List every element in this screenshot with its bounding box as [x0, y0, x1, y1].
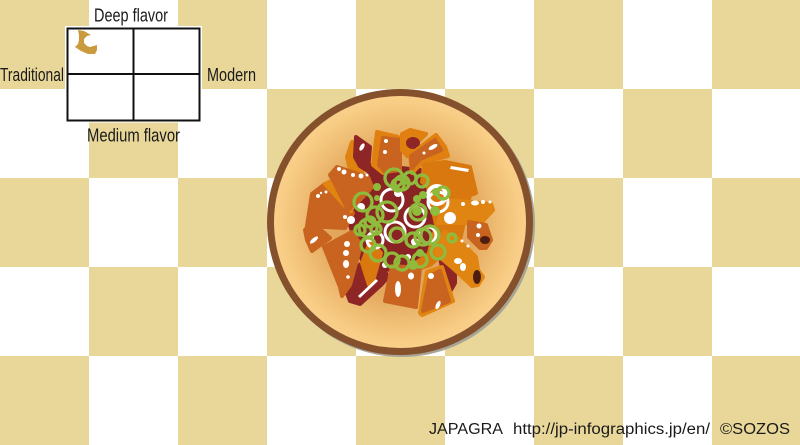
plate surface	[274, 96, 526, 348]
food: green onion pieces	[373, 183, 440, 270]
axis label: traditional: Traditional	[0, 64, 64, 85]
credit: url: http://jp-infographics.jp/en/	[513, 421, 711, 438]
axis label: medium flavor: Medium flavor	[87, 124, 180, 146]
orange underlay	[380, 170, 470, 275]
food: meat pieces	[305, 130, 493, 315]
plate shadow	[269, 91, 535, 357]
credit line	[429, 421, 790, 438]
positioning chart	[0, 4, 256, 146]
food: green onion rings	[354, 169, 456, 270]
bottom pieces	[420, 267, 453, 315]
dark red layers	[347, 253, 388, 304]
plate illustration	[267, 89, 535, 357]
top orange pieces	[373, 132, 400, 173]
chart grid	[65, 26, 202, 122]
axis label: deep flavor: Deep flavor	[94, 4, 168, 26]
icon: map marker shape	[75, 30, 97, 54]
food: white onion rings	[367, 186, 448, 248]
credit: copyright: ©SOZOS	[720, 421, 790, 438]
credit: japagra: JAPAGRA	[429, 421, 504, 438]
right pieces	[438, 200, 493, 223]
plate rim	[267, 89, 533, 355]
left pieces	[305, 222, 330, 251]
axis label: modern: Modern	[207, 64, 256, 85]
food: white fat highlights	[309, 139, 492, 310]
